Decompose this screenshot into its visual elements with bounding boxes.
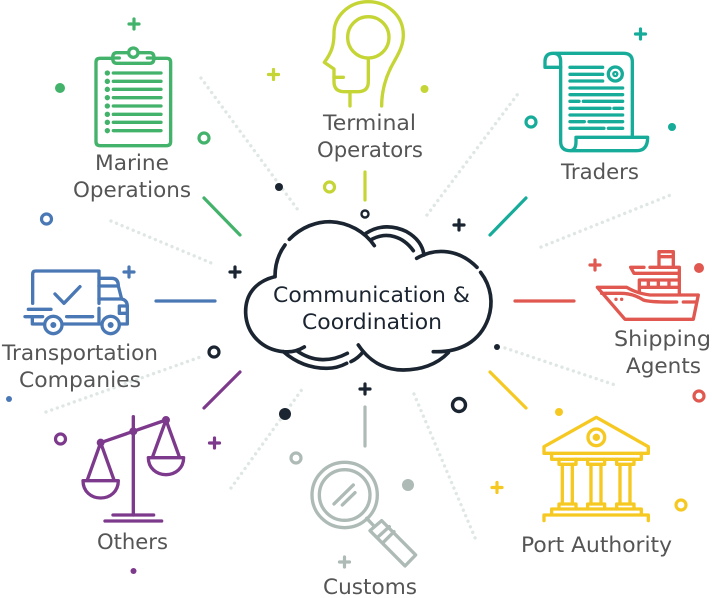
accents bbox=[56, 434, 220, 574]
cloud text: Coordination bbox=[302, 310, 442, 334]
cloud text bbox=[273, 283, 470, 334]
icon: cloud outline bbox=[246, 222, 491, 370]
spoke bbox=[156, 299, 215, 303]
accents bbox=[526, 29, 676, 131]
spoke bbox=[515, 299, 574, 303]
panel: Customs bbox=[291, 407, 417, 598]
icon: columned building bbox=[544, 417, 648, 521]
central cloud: Communication & Coordination bbox=[246, 222, 491, 370]
label: Shipping bbox=[614, 327, 711, 351]
panel: Transportation Companies bbox=[1, 214, 215, 402]
label bbox=[1, 341, 158, 392]
label: Agents bbox=[626, 354, 701, 378]
dark accents around cloud bbox=[209, 183, 500, 420]
panel: Marine Operations bbox=[55, 19, 240, 235]
cloud text: Communication & bbox=[273, 283, 470, 307]
panel: Terminal Operators bbox=[268, 2, 428, 200]
icon: magnifying glass bbox=[312, 462, 416, 566]
label bbox=[73, 151, 191, 202]
label: Companies bbox=[19, 368, 141, 392]
accents bbox=[590, 260, 704, 401]
label: Operations bbox=[73, 178, 191, 202]
accents bbox=[55, 19, 209, 143]
panel: Port Authority bbox=[490, 372, 686, 557]
label: Operators bbox=[317, 138, 423, 162]
label: Port Authority bbox=[521, 533, 672, 557]
label: Marine bbox=[95, 151, 169, 175]
label: Transportation bbox=[1, 341, 158, 365]
accents bbox=[268, 70, 428, 192]
icon: delivery truck bbox=[25, 271, 127, 334]
icon: head bbox=[324, 2, 403, 106]
label: Traders bbox=[560, 160, 639, 184]
label: Terminal bbox=[322, 111, 416, 135]
label bbox=[317, 111, 423, 162]
spoke bbox=[204, 198, 240, 235]
label bbox=[614, 327, 711, 378]
panel: Others bbox=[56, 372, 240, 574]
icon: clipboard bbox=[96, 48, 171, 146]
spoke bbox=[363, 407, 367, 446]
label: Others bbox=[97, 530, 168, 554]
panel: Traders bbox=[490, 29, 676, 235]
spoke bbox=[490, 198, 526, 235]
icon: ship bbox=[597, 252, 698, 319]
panel: Shipping Agents bbox=[515, 252, 711, 401]
accents bbox=[492, 408, 686, 510]
spoke bbox=[490, 372, 526, 408]
icon: balance scales bbox=[83, 417, 184, 521]
spoke bbox=[204, 372, 240, 408]
accents bbox=[6, 214, 134, 402]
icon: scroll bbox=[545, 53, 648, 151]
accents bbox=[291, 453, 414, 567]
spoke bbox=[363, 172, 367, 200]
